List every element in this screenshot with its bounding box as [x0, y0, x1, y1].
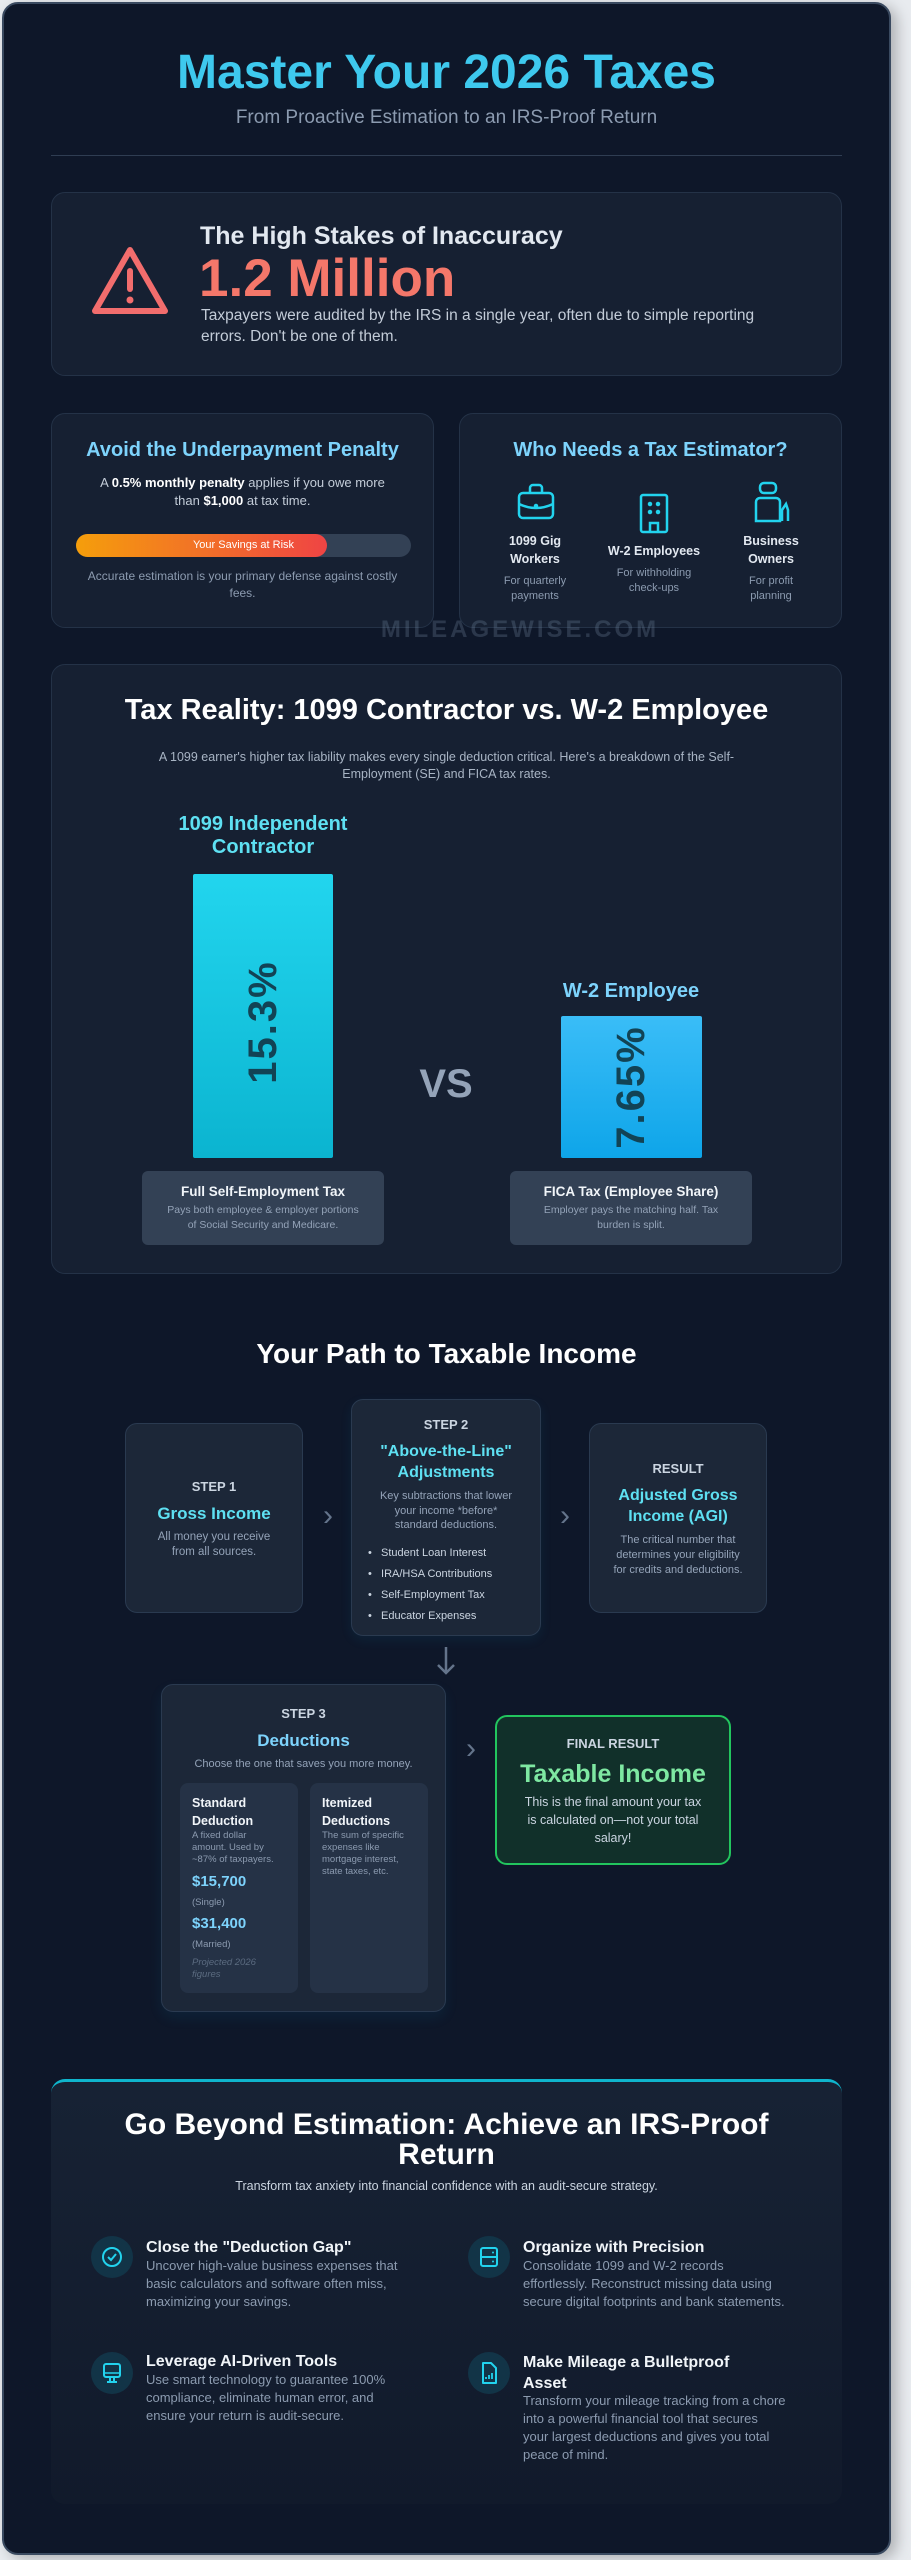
description: errors. Don't be one of them. — [201, 328, 398, 345]
bar chart: 1099: of Social Security and Medicare. — [188, 1219, 338, 1231]
step 3: Choose the one that saves you more money. — [194, 1758, 413, 1770]
result: AGI: The critical number that — [621, 1534, 735, 1546]
bar chart: 1099 — [142, 813, 384, 1245]
feature: organize: Consolidate 1099 and W-2 records — [523, 2258, 724, 2273]
feature: mileage: Make Mileage a Bulletproof — [523, 2354, 729, 2371]
panel: who needs estimator — [459, 413, 842, 628]
item: gig workers — [504, 484, 566, 602]
heading: Who Needs a Tax Estimator? — [513, 439, 788, 461]
result: AGI: for credits and deductions. — [613, 1564, 743, 1576]
item: business owners: Owners — [748, 552, 794, 566]
item: gig workers: 1099 Gig — [509, 534, 561, 548]
description — [201, 307, 754, 345]
text: than $1,000 at tax time. — [175, 493, 310, 508]
card: standard: (Married) — [192, 1939, 231, 1950]
card: itemized: The sum of specific — [322, 1830, 404, 1841]
feature: organize: Organize with Precision — [523, 2239, 704, 2256]
step 2: your income *before* — [395, 1504, 497, 1516]
bar: savings at risk: Your Savings at Risk — [193, 539, 294, 551]
heading: Return — [398, 2138, 495, 2171]
arrow: › — [323, 1499, 333, 1532]
card: standard: amount. Used by — [192, 1842, 264, 1853]
footer text — [88, 569, 398, 600]
item: w-2 employees — [608, 494, 700, 594]
final result: FINAL RESULT — [567, 1736, 659, 1751]
card: standard: $15,700 — [192, 1873, 246, 1890]
bar chart: 1099: 1099 Independent — [179, 813, 347, 835]
footer text: Accurate estimation is your primary defense against costly — [88, 569, 397, 583]
item: gig workers: Workers — [510, 552, 560, 566]
feature: organize: secure digital footprints and bank statements. — [523, 2294, 785, 2309]
bar chart: 1099: 15.3% — [241, 960, 285, 1084]
result: AGI — [589, 1423, 767, 1613]
card: standard — [180, 1783, 298, 1993]
heading — [124, 2108, 769, 2171]
bar chart: 1099: Contractor — [212, 836, 314, 858]
feature: deduction gap: maximizing your savings. — [146, 2294, 291, 2309]
step 2: Adjustments — [398, 1464, 494, 1481]
big stat: 1.2 Million — [199, 249, 455, 308]
result: AGI: Adjusted Gross — [618, 1487, 738, 1504]
step 3 — [161, 1684, 446, 2012]
panel: underpayment penalty — [51, 413, 434, 628]
item: w-2 employees: check-ups — [629, 582, 679, 594]
feature: mileage: Transform your mileage tracking from a chore — [523, 2393, 786, 2408]
subtext: Employment (SE) and FICA tax rates. — [342, 767, 551, 781]
subtitle: Transform tax anxiety into financial confidence with an audit-secure strategy. — [235, 2179, 658, 2193]
arrow: › — [466, 1732, 476, 1765]
feature: mileage: peace of mind. — [523, 2447, 608, 2462]
card: standard: (Single) — [192, 1897, 225, 1908]
icon: warning — [92, 247, 168, 314]
bar: savings at risk — [76, 534, 411, 557]
step 2 — [351, 1399, 541, 1636]
step 1: All money you receive — [158, 1531, 270, 1543]
footer text: fees. — [229, 586, 256, 600]
item: gig workers: For quarterly — [504, 575, 566, 587]
final result: is calculated on—not your total — [528, 1813, 698, 1827]
card: itemized: expenses like — [322, 1842, 380, 1853]
bar chart: w-2: 7.65% — [609, 1025, 653, 1149]
feature: organize: effortlessly. Reconstruct missing data using — [523, 2276, 772, 2291]
step 2: standard deductions. — [395, 1519, 497, 1531]
step 2: STEP 2 — [424, 1417, 468, 1432]
title: Master Your 2026 Taxes — [177, 46, 716, 99]
text: A 0.5% monthly penalty applies if you owe more — [100, 475, 385, 490]
card: itemized: Itemized — [322, 1796, 372, 1810]
feature: ai tools: ensure your return is audit-secure. — [146, 2408, 344, 2423]
step 1 — [125, 1423, 303, 1613]
feature: ai tools: compliance, eliminate human error, and — [146, 2390, 374, 2405]
item: business owners: planning — [750, 590, 792, 602]
step 2: • IRA/HSA Contributions — [368, 1568, 492, 1580]
panel: tax reality — [51, 664, 842, 1274]
item: w-2 employees: W-2 Employees — [608, 544, 700, 558]
bar chart: w-2: FICA Tax (Employee Share) — [544, 1184, 718, 1199]
arrow: down — [437, 1647, 455, 1675]
result: AGI: Income (AGI) — [628, 1508, 728, 1525]
step 2: "Above-the-Line" — [380, 1443, 512, 1460]
subtitle: From Proactive Estimation to an IRS-Proof Return — [236, 107, 657, 128]
feature: ai tools — [91, 2352, 385, 2423]
subtext — [159, 750, 734, 781]
bar chart: 1099: Pays both employee & employer portions — [167, 1204, 359, 1216]
heading: path: Your Path to Taxable Income — [256, 1338, 637, 1369]
card: itemized: state taxes, etc. — [322, 1866, 389, 1877]
step 1: from all sources. — [172, 1546, 256, 1558]
feature: mileage: into a powerful financial tool that secures — [523, 2411, 758, 2426]
heading: Tax Reality: 1099 Contractor vs. W-2 Employee — [125, 694, 768, 726]
text — [100, 475, 385, 508]
bar chart: w-2: W-2 Employee — [563, 980, 699, 1002]
card: standard: A fixed dollar — [192, 1830, 246, 1841]
step 3: Deductions — [257, 1731, 350, 1750]
step 2: Key subtractions that lower — [380, 1490, 512, 1502]
item: business owners — [743, 482, 799, 602]
step 2: • Self-Employment Tax — [368, 1589, 485, 1601]
feature: deduction gap: Close the "Deduction Gap" — [146, 2239, 351, 2256]
feature: ai tools: Leverage AI-Driven Tools — [146, 2353, 337, 2370]
bar chart: 1099: Full Self-Employment Tax — [181, 1184, 345, 1199]
card: itemized: mortgage interest, — [322, 1854, 399, 1865]
result: AGI: RESULT — [652, 1461, 704, 1476]
heading: The High Stakes of Inaccuracy — [200, 222, 563, 250]
watermark: MILEAGEWISE.COM — [381, 616, 659, 643]
heading: Avoid the Underpayment Penalty — [86, 439, 399, 461]
panel: go beyond — [51, 2079, 842, 2504]
feature: organize — [468, 2236, 785, 2309]
feature: deduction gap: Uncover high-value business expenses that — [146, 2258, 397, 2273]
panel: high stakes — [51, 192, 842, 376]
final result: Taxable Income — [520, 1760, 706, 1788]
feature: deduction gap — [91, 2236, 398, 2309]
feature: ai tools: Use smart technology to guarantee 100% — [146, 2372, 385, 2387]
subtext: A 1099 earner's higher tax liability makes every single deduction critical. Here's a breakdown of the Self- — [159, 750, 734, 764]
step 2: • Educator Expenses — [368, 1610, 476, 1622]
item: business owners: Business — [743, 534, 799, 548]
feature: mileage: your largest deductions and gives you total — [523, 2429, 769, 2444]
card: standard: Deduction — [192, 1814, 253, 1828]
card: standard: figures — [192, 1969, 221, 1980]
card: standard: ~87% of taxpayers. — [192, 1854, 274, 1865]
vs label: VS — [419, 1062, 473, 1106]
feature: deduction gap: basic calculators and software often miss, — [146, 2276, 387, 2291]
card: standard: Standard — [192, 1796, 246, 1810]
bar chart: w-2: burden is split. — [597, 1219, 665, 1231]
final result — [495, 1715, 731, 1865]
card: standard: $31,400 — [192, 1915, 246, 1932]
item: business owners: For profit — [749, 575, 793, 587]
card: standard: Projected 2026 — [192, 1957, 256, 1968]
card: itemized: Deductions — [322, 1814, 390, 1828]
heading: Go Beyond Estimation: Achieve an IRS-Proof — [124, 2108, 768, 2141]
card: itemized — [310, 1783, 428, 1993]
item: w-2 employees: For withholding — [617, 567, 691, 579]
item: gig workers: payments — [511, 590, 559, 602]
step 3: STEP 3 — [281, 1706, 326, 1721]
final result: This is the final amount your tax — [525, 1795, 701, 1809]
final result: salary! — [595, 1831, 631, 1845]
feature: mileage — [468, 2352, 786, 2462]
description: Taxpayers were audited by the IRS in a single year, often due to simple reporting — [201, 307, 754, 324]
bar chart: w-2: Employer pays the matching half. Tax — [544, 1204, 718, 1216]
step 1: STEP 1 — [192, 1479, 236, 1494]
result: AGI: determines your eligibility — [616, 1549, 740, 1561]
bar chart: w-2 — [510, 980, 752, 1245]
arrow: › — [560, 1499, 570, 1532]
step 2: • Student Loan Interest — [368, 1547, 486, 1559]
feature: mileage: Asset — [523, 2375, 567, 2392]
step 1: Gross Income — [157, 1504, 271, 1523]
